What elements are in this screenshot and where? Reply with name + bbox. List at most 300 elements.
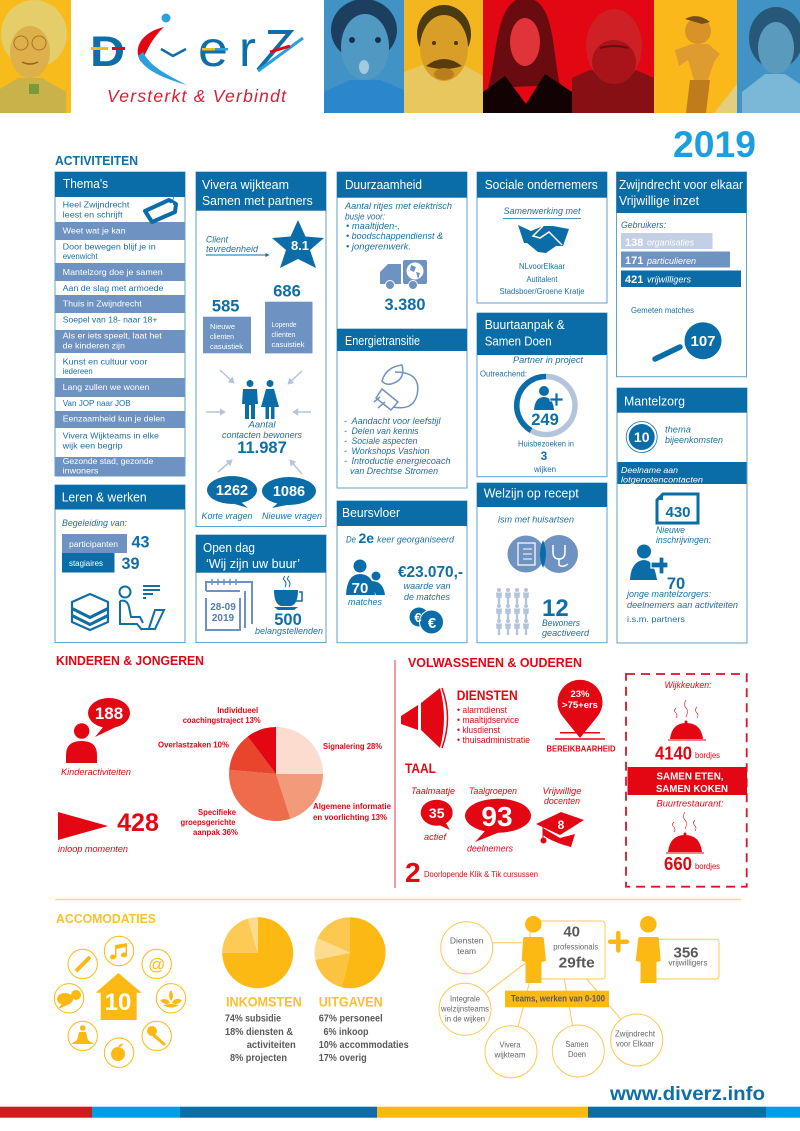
panel: Buurtaanpak & Samen Doen: Buurtaanpak &	[485, 318, 565, 332]
panel: Thema's: Aan de slag met armoede	[63, 283, 164, 293]
panel: Thema's: Vivera Wijkteams in elke	[63, 430, 159, 440]
icon: star 8.1: 8.1	[291, 238, 309, 253]
bar: participanten: participanten	[69, 540, 118, 549]
block: Uitgaven: 67% personeel	[319, 1014, 383, 1025]
box: 356 vrijwilligers: vrijwilligers	[668, 959, 708, 968]
box: 40 professionals: 40	[563, 924, 580, 941]
circle: Integrale welzijnsteams: in de wijken	[445, 1014, 485, 1024]
partners list: NLvoorElkaar	[519, 262, 565, 271]
chart: pie kinderen en jongeren	[158, 705, 391, 837]
circle: Diensten team	[441, 922, 493, 974]
list: energie onderwerpen	[344, 416, 450, 476]
text: ritjes: • jongerenwerk.	[346, 242, 411, 252]
block: Diensten: • klusdienst	[457, 725, 500, 735]
bar: 171 particulieren: 171	[625, 255, 643, 267]
labels: korte en nieuwe vragen	[202, 511, 322, 521]
stat: 428 inloop momenten: inloop momenten	[58, 844, 128, 854]
logo: Diverz Versterkt & Verbindt: D	[90, 28, 125, 76]
panel: Buurtaanpak & Samen Doen: Samen Doen	[485, 335, 552, 349]
icon: stack of books	[72, 594, 108, 630]
labels: korte en nieuwe vragen: Nieuwe vragen	[262, 511, 322, 521]
band: samen eten samen koken	[628, 767, 747, 795]
panel: Thema's: Thuis in Zwijndrecht	[63, 299, 142, 309]
panel: Thema's: Gezonde stad, gezonde	[63, 456, 154, 466]
pie labels: Signalering 28%	[323, 741, 382, 751]
stat: 660 bordjes: 660	[664, 854, 692, 874]
text: ritjes: • boodschappendienst &	[346, 231, 443, 241]
icon: euro coins: €	[414, 610, 422, 625]
website url: www.diverz.info	[609, 1084, 765, 1105]
stat: 686 lopende clienten: Lopende	[272, 320, 296, 329]
block: Uitgaven	[319, 994, 409, 1064]
chart: pie uitgaven	[315, 917, 386, 988]
list: energie onderwerpen: -	[344, 456, 347, 466]
speech bubbles: 1086	[273, 484, 305, 500]
list: energie onderwerpen: -	[344, 426, 347, 436]
circle: Samen Doen	[552, 1025, 604, 1077]
icon: document 430	[657, 494, 698, 523]
bar: 421 vrijwilligers: vrijwilligers	[647, 274, 691, 286]
section heading: Activiteiten: ACTIVITEITEN	[55, 153, 138, 168]
panel: Thema's: Thema's	[63, 177, 108, 191]
text: 2e keer georganiseerd: keer georganiseerd	[377, 535, 455, 545]
block: Inkomsten: 8% projecten	[230, 1053, 287, 1064]
panel: Buurtaanpak & Samen Doen: Partner in project	[513, 355, 583, 365]
bar: 138 organisaties: 138	[625, 237, 643, 249]
block: Diensten: • maaltijdservice	[457, 715, 519, 725]
client tevredenheid: tevredenheid	[206, 244, 259, 254]
band: lotgenotencontacten	[618, 462, 746, 484]
panel: Welzijn op recept: ism met huisartsen	[498, 515, 574, 525]
photo: woman and man on red	[483, 0, 654, 113]
logo: Diverz Versterkt & Verbindt	[90, 14, 303, 106]
block: Inkomsten: 74% subsidie	[225, 1014, 281, 1025]
pie labels: en voorlichting 13%	[313, 812, 387, 822]
panel: Thema's: Als er iets speelt, laat het	[63, 331, 162, 341]
block: Diensten: • alarmdienst	[457, 705, 507, 715]
huisbezoeken tekst: 3	[541, 449, 548, 463]
chart: ring 249 huisbezoeken	[517, 376, 575, 434]
stat: 660 bordjes	[664, 854, 720, 874]
band: lotgenotencontacten: Deelname aan	[621, 465, 678, 475]
apple	[111, 1044, 125, 1061]
stat: 4140 bordjes	[655, 743, 720, 763]
meditating figure	[71, 1025, 94, 1044]
circle: Samen Doen: Doen	[568, 1049, 586, 1059]
partners list: Stadsboer/Groene Kratje	[500, 287, 585, 296]
stat: 686 lopende clienten: casuistiek	[272, 340, 305, 349]
section heading: Accomodaties: ACCOMODATIES	[56, 911, 156, 926]
text: ritjes: Aantal ritjes met elektrisch	[344, 201, 452, 211]
block: Diensten: DIENSTEN	[457, 687, 518, 703]
panel: Beursvloer	[337, 501, 467, 643]
stat: 10 themabijeenkomsten: bijeenkomsten	[665, 435, 723, 445]
block: Inkomsten: activiteiten	[247, 1040, 296, 1051]
block: Inkomsten: INKOMSTEN	[226, 994, 302, 1010]
stat: 428 inloop momenten: 428	[117, 809, 159, 837]
stat: 12 bewoners	[542, 595, 590, 638]
icon: cloche buurtrestaurant	[666, 812, 704, 853]
stat: aantal contacten: 11.987	[237, 439, 287, 457]
icon: people with 70	[346, 560, 385, 607]
bar: teams werken van 0-100: Teams, werken van 0-100	[511, 994, 605, 1005]
box: 356 vrijwilligers	[650, 939, 719, 979]
bar: 421 vrijwilligers	[621, 270, 741, 287]
circle: Integrale welzijnsteams: Integrale	[450, 994, 480, 1004]
stat: 4140 bordjes: bordjes	[695, 750, 720, 760]
partners list	[500, 262, 585, 296]
pie labels: groepsgerichte	[180, 817, 236, 827]
stat: 585 nieuwe clienten	[203, 298, 251, 353]
circle: Vivera wijkteam: wijkteam	[494, 1050, 526, 1060]
panel: Samen eten, samen koken: Wijkkeuken:	[664, 680, 712, 690]
stat: Taalmaatje 35: 35	[429, 805, 445, 821]
bar: participanten: 43	[132, 534, 150, 552]
icon: magnifier 107: 107	[690, 333, 716, 350]
bar: participanten	[62, 534, 150, 553]
list: energie onderwerpen: Workshops Vashion	[352, 446, 430, 456]
icon: electric truck	[380, 260, 427, 290]
box: 40 professionals: professionals	[553, 942, 598, 951]
panel: Thema's: Van JOP naar JOB	[63, 398, 131, 408]
panel: Open dag: Open dag	[203, 541, 255, 555]
client tevredenheid	[206, 235, 268, 255]
stat: 686 lopende clienten: clienten	[272, 330, 296, 339]
chart: ring 249 huisbezoeken: 249	[531, 411, 559, 429]
huisbezoeken tekst: wijken	[533, 465, 556, 474]
bar: 138 organisaties: organisaties	[647, 238, 694, 248]
icon: people with 70: matches	[348, 597, 382, 607]
panel: Duurzaamheid: Duurzaamheid	[345, 178, 422, 192]
bar: 171 particulieren	[621, 252, 730, 268]
band: samen eten samen koken: SAMEN ETEN,	[656, 770, 724, 782]
text: nieuwe inschrijvingen	[656, 525, 711, 545]
pencil	[76, 957, 90, 971]
panel: Open dag: ‘Wij zijn uw buur’	[206, 557, 300, 571]
panel: Mantelzorg	[617, 388, 747, 643]
logo: Diverz Versterkt & Verbindt: r	[239, 21, 256, 77]
stat: 10 themabijeenkomsten: 10	[634, 429, 650, 445]
panel: Thema's: Lang zullen we wonen	[63, 382, 150, 392]
stat: waarde matches: waarde van	[404, 581, 450, 591]
icon: handshake	[518, 225, 569, 253]
block: Uitgaven: 6% inkoop	[324, 1027, 368, 1038]
photo: man with moustache on yellow	[404, 0, 483, 113]
panel: Vivera wijkteam: Samen met partners	[202, 194, 313, 208]
panel: Open dag	[196, 535, 326, 642]
list: energie onderwerpen: Aandacht voor leefstijl	[350, 416, 441, 426]
stat: 500 belangstellenden: belangstellenden	[255, 626, 323, 636]
panel: Energietransitie	[337, 329, 467, 488]
panel: Mantelzorg: Mantelzorg	[624, 395, 685, 409]
icon: calendar	[206, 579, 252, 630]
bar: stagiaires: stagiaires	[69, 559, 103, 568]
stat: waarde matches	[398, 564, 463, 602]
text: 2e keer georganiseerd: 2e	[358, 530, 374, 546]
box: 40 professionals: 29fte	[559, 955, 595, 972]
text: ritjes: busje voor:	[345, 212, 385, 222]
stat: Taalmaatje 35: actief	[424, 832, 448, 842]
stat: 4140 bordjes: 4140	[655, 743, 692, 763]
stat: 686 lopende clienten: 686	[273, 283, 301, 301]
circle: Integrale welzijnsteams	[439, 983, 491, 1035]
stat: 585 nieuwe clienten: clienten	[210, 332, 234, 341]
stat: aantal contacten: Aantal	[247, 420, 277, 430]
stat: 70 jonge mantelzorgers: deelnemers aan activiteiten	[627, 600, 738, 610]
client tevredenheid: Client	[206, 235, 228, 245]
icons: accommodation activities	[54, 936, 186, 1067]
block: Inkomsten	[225, 994, 302, 1064]
pie labels: Individueel	[217, 705, 258, 715]
panel: Thema's: de kinderen zijn	[63, 340, 125, 350]
circle: Vivera wijkteam: Vivera	[500, 1040, 521, 1050]
circle: Vivera wijkteam	[485, 1026, 537, 1078]
team connector lines	[487, 943, 621, 1026]
text: i.s.m. partners: i.s.m. partners	[627, 614, 685, 624]
icon: person plus	[630, 544, 668, 580]
circle: Integrale welzijnsteams: welzijnsteams	[440, 1004, 489, 1014]
icon: house with 10: 10	[105, 989, 131, 1016]
stat: 660 bordjes: bordjes	[695, 861, 720, 871]
bar: stagiaires: 39	[122, 555, 140, 573]
panel: Leren & werken: Leren & werken	[62, 491, 147, 505]
stat: 70 jonge mantelzorgers: 70	[667, 575, 685, 593]
icon: person vrijwilligers	[636, 916, 661, 983]
stat: 686 lopende clienten	[265, 283, 312, 353]
panel: Zwijndrecht voor elkaar: Gemeten matches	[631, 306, 694, 315]
circle: Zwijndrecht voor Elkaar	[611, 1014, 663, 1066]
text: ritjes: • maaltijden-,	[346, 221, 400, 231]
block: Uitgaven: UITGAVEN	[319, 994, 383, 1010]
stat: Vrijwillige docenten 8	[536, 786, 584, 847]
labels: korte en nieuwe vragen: Korte vragen	[202, 511, 252, 521]
huisbezoeken tekst	[518, 440, 574, 474]
panel: Thema's: evenwicht	[63, 251, 98, 261]
icon: people with 70: 70	[352, 580, 368, 597]
pie labels: coachingstraject 13%	[183, 715, 261, 725]
panel: Thema's	[55, 172, 185, 476]
circle: Zwijndrecht voor Elkaar: Zwijndrecht	[615, 1028, 656, 1038]
stat: waarde matches: de matches	[404, 592, 450, 602]
icon: calendar: 28-09	[210, 602, 236, 613]
bar: stagiaires	[62, 553, 140, 573]
panel: Thema's: Eenzaamheid kun je delen	[63, 414, 165, 424]
icon: plug with leaf	[374, 365, 418, 410]
list: energie onderwerpen: -	[344, 436, 347, 446]
list: energie onderwerpen: -	[344, 446, 347, 456]
stat: 3.380: 3.380	[384, 296, 426, 314]
stat: 2 Klik & Tik	[405, 857, 538, 888]
text: 2e keer georganiseerd	[346, 530, 455, 546]
stat: 500 belangstellenden	[255, 611, 323, 636]
box: 40 professionals	[530, 921, 605, 979]
panel: Thema's: Mantelzorg doe je samen	[63, 267, 163, 277]
block: Diensten	[457, 687, 530, 745]
panel: Thema's: inwoners	[63, 465, 99, 475]
stat: 585 nieuwe clienten: 585	[212, 298, 239, 316]
icon: plus	[610, 933, 627, 950]
list: energie onderwerpen: Introductie energiecoach	[352, 456, 450, 466]
panel: Samen eten, samen koken: Buurtrestaurant:	[656, 799, 724, 809]
list: energie onderwerpen: Sociale aspecten	[352, 436, 418, 446]
at sign: @	[148, 955, 165, 974]
photo: woman on blue	[737, 0, 800, 113]
panel: Welzijn op recept	[477, 483, 607, 643]
panel: Thema's: Door bewegen blijf je in	[63, 241, 156, 251]
panel: Welzijn op recept: Welzijn op recept	[484, 487, 579, 501]
stat: 585 nieuwe clienten: casuistiek	[210, 342, 243, 351]
stat: 428 inloop momenten	[58, 809, 159, 854]
panel: Duurzaamheid	[337, 172, 467, 329]
microphone	[147, 1026, 166, 1046]
stat: 585 nieuwe clienten: Nieuwe	[210, 322, 235, 331]
icon: calendar: 2019	[212, 613, 235, 624]
photo: baby on yellow	[654, 0, 737, 113]
section heading: Kinderen & Jongeren: KINDEREN & JONGEREN	[56, 653, 204, 668]
stat: aantal contacten	[222, 420, 302, 457]
stat: Taalmaatje 35: Taalmaatje	[411, 786, 455, 796]
bar: 421 vrijwilligers: 421	[625, 274, 643, 286]
box: 356 vrijwilligers: 356	[673, 944, 699, 961]
leaves	[160, 990, 182, 1008]
stat: 12 bewoners: geactiveerd	[542, 628, 590, 638]
panel: Buurtaanpak & Samen Doen: Outreachend:	[480, 370, 527, 379]
icon: euro coins: €	[428, 615, 437, 632]
stat: waarde matches: €23.070,-	[398, 564, 463, 581]
panel: Vivera wijkteam: Vivera wijkteam	[202, 178, 289, 192]
block: Inkomsten: 18% diensten &	[225, 1027, 293, 1038]
icon: map pin bereikbaarheid: 23%	[570, 689, 590, 700]
icon: price tag	[145, 189, 176, 222]
block: Uitgaven: 17% overig	[319, 1053, 367, 1064]
label: kinderactiviteiten: Kinderactiviteiten	[61, 767, 131, 777]
pie labels	[158, 705, 391, 837]
panel: Buurtaanpak & Samen Doen	[477, 313, 607, 477]
speech bubbles	[207, 476, 316, 508]
circle: Zwijndrecht voor Elkaar: voor Elkaar	[616, 1038, 654, 1048]
panel: Vivera wijkteam	[196, 172, 326, 526]
panel: Thema's: Heel Zwijndrecht	[63, 200, 130, 210]
panel: Thema's: wijk een begrip	[62, 440, 123, 450]
panel: Zwijndrecht voor elkaar: Zwijndrecht voor elkaar	[619, 178, 743, 192]
text: ritjes	[344, 201, 452, 252]
logo: Diverz Versterkt & Verbindt: e	[198, 21, 228, 77]
panel: Zwijndrecht voor elkaar: Gebruikers:	[621, 220, 666, 230]
stat: 10 themabijeenkomsten	[626, 422, 723, 452]
stat: 10 themabijeenkomsten: thema	[665, 425, 691, 435]
section heading: Volwassenen & Ouderen: VOLWASSENEN & OUDEREN	[408, 655, 582, 670]
panel: Leren & werken: Begeleiding van:	[62, 518, 127, 528]
pie labels: Algemene informatie	[313, 801, 391, 811]
samenwerking met: Samenwerking met	[504, 206, 581, 216]
stat: Taalgroepen 93: 93	[481, 801, 513, 832]
pie labels: Specifieke	[198, 807, 236, 817]
stat: Vrijwillige docenten 8: docenten	[544, 796, 580, 806]
panel: Energietransitie: Energietransitie	[345, 334, 420, 348]
icon: map pin bereikbaarheid: >75+ers	[562, 700, 598, 711]
stat: aantal contacten: contacten bewoners	[222, 430, 302, 440]
stat: Vrijwillige docenten 8: 8	[558, 818, 565, 832]
panel: Thema's: leest en schrijft	[63, 210, 123, 220]
band: lotgenotencontacten: lotgenotencontacten	[621, 474, 703, 484]
photo: older woman on yellow	[0, 0, 71, 113]
panel: Sociale ondernemers	[477, 172, 607, 303]
stat: Taalmaatje 35	[411, 786, 455, 842]
stat: 2 Klik & Tik: Doorlopende Klik & Tik cursussen	[424, 869, 538, 879]
huisbezoeken tekst: Huisbezoeken in	[518, 440, 574, 449]
block: Uitgaven: 10% accommodaties	[319, 1040, 409, 1051]
panel: Samen eten, samen koken	[626, 674, 747, 887]
pie labels: aanpak 36%	[193, 827, 238, 837]
stat: Vrijwillige docenten 8: Vrijwillige	[542, 786, 582, 796]
stat: 70 jonge mantelzorgers: jonge mantelzorgers:	[626, 589, 711, 599]
music note	[110, 943, 127, 960]
icon: person with 188 bubble: 188	[95, 704, 123, 723]
panel: Thema's: Weet wat je kan	[63, 225, 126, 235]
icon: cloche wijkkeuken	[668, 700, 706, 740]
panel: Zwijndrecht voor elkaar	[616, 172, 746, 377]
bar: 138 organisaties	[621, 233, 712, 249]
stat: Taalgroepen 93	[465, 786, 531, 854]
stat: 12 bewoners: Bewoners	[542, 618, 580, 628]
icon: coffee cup	[274, 576, 302, 610]
list: energie onderwerpen: van Drechtse Stromen	[350, 466, 438, 476]
stat: Taalgroepen 93: deelnemers	[467, 844, 513, 854]
panel: Sociale ondernemers: Sociale ondernemers	[485, 178, 598, 192]
icon: person professionals	[522, 916, 546, 983]
list: energie onderwerpen: -	[344, 416, 347, 426]
logo: Diverz Versterkt & Verbindt: Versterkt & Verbindt	[107, 86, 287, 106]
pie labels: Overlastzaken 10%	[158, 740, 229, 750]
icon: person at laptop	[120, 586, 164, 630]
chat bubbles	[57, 990, 81, 1009]
stat: 70 jonge mantelzorgers	[626, 575, 738, 610]
icon: grid of people	[496, 588, 529, 635]
panel: Zwijndrecht voor elkaar: Vrijwillige inzet	[619, 194, 700, 208]
panel: Leren & werken	[55, 485, 185, 642]
band: samen eten samen koken: SAMEN KOKEN	[656, 783, 728, 795]
stat: 2 Klik & Tik: 2	[405, 857, 421, 888]
icon: person with 188 bubble	[66, 698, 130, 763]
circle: Diensten team: Diensten	[450, 936, 484, 946]
stat: Taalgroepen 93: Taalgroepen	[469, 786, 517, 796]
photo: boy on blue	[324, 0, 404, 113]
icon: man and woman	[242, 380, 279, 419]
stat: 12 bewoners: 12	[542, 595, 569, 622]
icon: star 8.1	[272, 220, 324, 268]
stat: 500 belangstellenden: 500	[274, 611, 302, 629]
icon: house with 10	[96, 973, 142, 1020]
circle: Samen Doen: Samen	[566, 1039, 589, 1049]
chart: pie inkomsten	[222, 917, 293, 988]
panel: Thema's: iedereen	[63, 366, 93, 376]
panel: Beursvloer: Beursvloer	[342, 506, 400, 520]
icon: document 430: 430	[665, 504, 691, 521]
bar: 171 particulieren: particulieren	[646, 256, 696, 267]
text: nieuwe inschrijvingen: inschrijvingen:	[656, 535, 711, 545]
icon: euro coins	[410, 608, 444, 634]
icon: map pin bereikbaarheid	[546, 680, 616, 754]
block: Diensten: • thuisadministratie	[457, 735, 530, 745]
icon: map pin bereikbaarheid: BEREIKBAARHEID	[546, 744, 616, 754]
arrows towards people	[206, 370, 311, 474]
list: energie onderwerpen: Delen van kennis	[352, 426, 419, 436]
text: nieuwe inschrijvingen: Nieuwe	[656, 525, 685, 535]
text: 2e keer georganiseerd: De	[346, 535, 356, 545]
partners list: Autitalent	[526, 275, 558, 284]
icon: magnifier 107	[655, 322, 722, 359]
circle: Diensten team: team	[457, 946, 476, 956]
